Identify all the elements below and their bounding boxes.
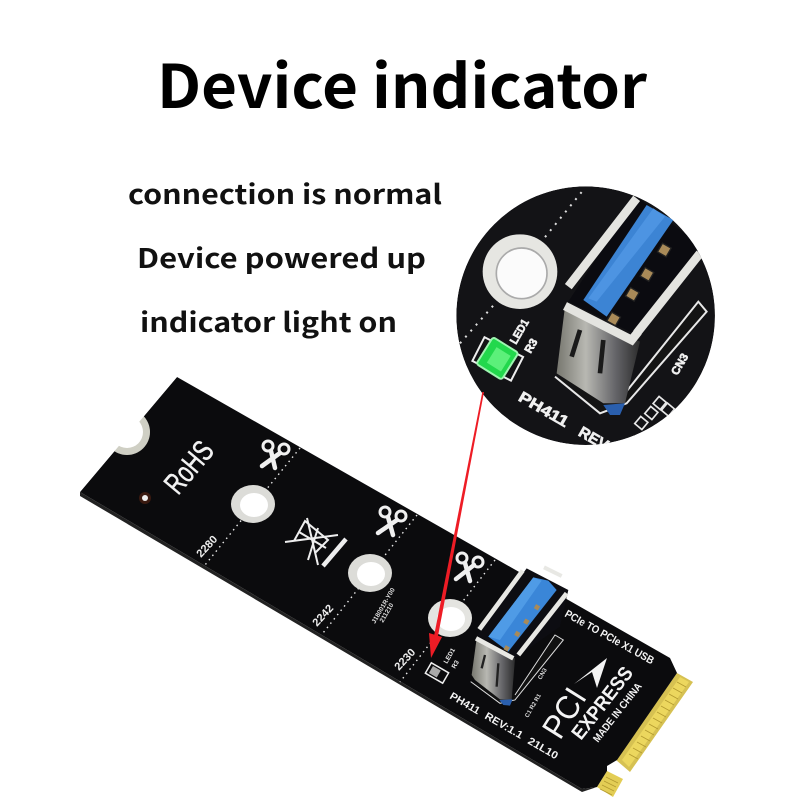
silkscreen text: model and revision: PH411 (447, 691, 482, 717)
inset board labels: PH411 (515, 389, 572, 431)
icon: scissors (378, 507, 406, 535)
inset USB housing (557, 307, 640, 403)
size labels: 2242 (310, 603, 336, 629)
PCI Express logo: PCI (535, 681, 593, 745)
gold contacts (597, 673, 693, 797)
cut lines (205, 448, 495, 682)
component labels (525, 667, 549, 719)
mounting holes (231, 485, 472, 637)
inset background (456, 186, 715, 445)
component labels: CN3 (538, 667, 549, 681)
USB top tab (544, 567, 562, 576)
USB blue tongue (488, 577, 557, 652)
USB housing slot (482, 655, 498, 687)
inset board labels: CN3 (670, 352, 691, 377)
icon: scissors (262, 441, 289, 468)
PCI Express logo (535, 658, 645, 745)
PCI Express logo: EXPRESS (568, 663, 638, 744)
text block: indicator description: Device powered up (137, 237, 426, 276)
inset board labels (508, 317, 691, 455)
inset board labels: REV (575, 424, 612, 455)
circuit board (60, 370, 693, 797)
inset solder outline (555, 302, 707, 413)
inset housing slot (572, 330, 603, 373)
mounting notch (60, 370, 177, 492)
component labels: C1 R2 R1 (525, 693, 543, 719)
USB dark interior (477, 568, 568, 658)
silkscreen text: model and revision (447, 691, 560, 762)
inset magnified circle (456, 186, 715, 455)
inset USB interior (568, 197, 707, 333)
text block: indicator description: indicator light on (140, 301, 397, 340)
silkscreen text: product name: PCIe TO PCIe X1 USB (563, 608, 656, 667)
LED label (443, 647, 461, 670)
inset USB blue tongue (583, 205, 673, 317)
inset component pads (635, 396, 675, 430)
USB white rim (476, 571, 567, 658)
silkscreen text: model and revision: REV:1.1 (482, 711, 525, 742)
inset cut line (460, 190, 583, 343)
text block: indicator description: connection is normal (128, 173, 442, 212)
board body (80, 377, 677, 789)
size labels (194, 534, 418, 673)
LED label: LED1 (443, 647, 457, 665)
inset USB white rim (565, 198, 700, 340)
board edge (80, 492, 597, 792)
part code: 211210 (379, 602, 396, 624)
red arrow (429, 392, 484, 658)
inset board labels: R3 (523, 337, 540, 355)
icon: scissors (456, 553, 483, 581)
icon: crossed-out bin (285, 518, 346, 566)
USB solder outline (471, 635, 563, 703)
USB blue base (499, 699, 513, 706)
RoHS mark: RoHS (158, 435, 221, 501)
USB port (471, 567, 568, 706)
green LED indicator (471, 336, 524, 382)
inset mounting hole (483, 234, 557, 309)
size labels: 2230 (392, 647, 418, 673)
via (139, 492, 151, 504)
size labels: 2280 (194, 534, 220, 560)
title: Device indicator (157, 39, 648, 126)
part code: J18001R-Y00 (371, 587, 397, 625)
inset USB blue base (603, 403, 625, 415)
LED label: R3 (451, 659, 461, 670)
inset USB contacts (607, 243, 671, 326)
USB contacts (503, 604, 540, 652)
silkscreen text: model and revision: 21L10 (525, 736, 560, 762)
LED footprint (425, 663, 449, 683)
PCI Express logo: MADE IN CHINA (591, 680, 645, 745)
inset board labels: LED1 (508, 317, 532, 346)
text block: indicator description (128, 173, 442, 340)
USB metal housing (472, 638, 515, 700)
